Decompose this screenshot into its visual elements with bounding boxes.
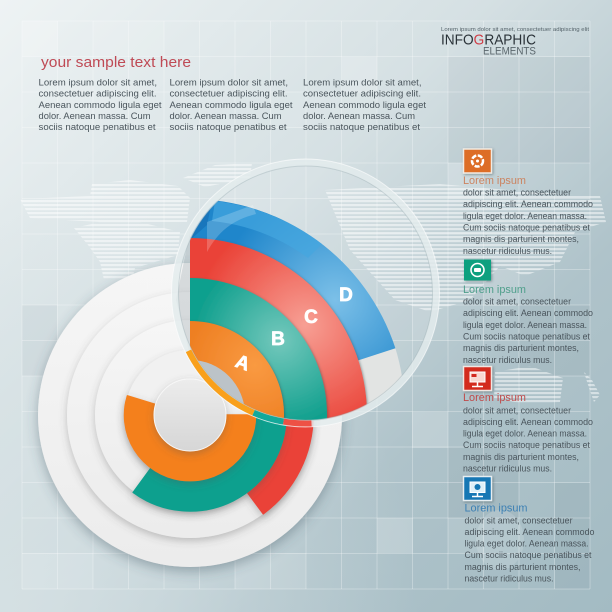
intro column 2: sociis natoque penatibus et: [170, 122, 287, 132]
icon: red monitor: [464, 366, 492, 390]
lens gloss: [207, 205, 256, 252]
intro column 2: Lorem ipsum dolor sit amet,: [170, 78, 288, 88]
block 3 text: nascetur ridiculus mus.: [463, 464, 552, 474]
magnified segments: [190, 200, 402, 421]
title block: INFOGRAPHIC: [441, 32, 536, 48]
intro column 2: [170, 78, 293, 132]
title block: Lorem ipsum dolor sit amet, consectetuer adipiscing elit: [441, 27, 590, 33]
icon: orange target: [464, 149, 492, 173]
intro column 3: Aenean commodo ligula eget: [303, 100, 427, 110]
intro column 1: Aenean commodo ligula eget: [38, 100, 162, 110]
block 4 text: magnis dis parturient montes,: [464, 562, 580, 572]
ring segment: orange lower: [125, 396, 256, 481]
title block: ELEMENTS: [483, 46, 536, 58]
ring segment: red lower: [246, 415, 313, 514]
block 2 text: dolor sit amet, consectetuer: [463, 296, 571, 306]
block 1 text: [463, 175, 593, 256]
white wedge: [358, 348, 402, 404]
faint globe: [476, 510, 524, 570]
block 4 text: Lorem ipsum: [464, 502, 528, 514]
blue dark corner: [192, 210, 210, 238]
intro column 1: [38, 78, 162, 132]
block 1 text: dolor sit amet, consectetuer: [463, 188, 571, 198]
intro column 1: Lorem ipsum dolor sit amet,: [38, 78, 157, 88]
block 2 text: [463, 284, 593, 365]
block 3 text: magnis dis parturient montes,: [463, 452, 579, 462]
center hub disc: [154, 379, 226, 451]
heading: your sample text here: [41, 55, 191, 71]
block 1 text: Cum sociis natoque penatibus et: [463, 222, 590, 232]
letter B: B: [271, 329, 285, 350]
intro column 3: consectetuer adipiscing elit.: [303, 88, 421, 98]
intro column 1: dolor. Aenean massa. Cum: [38, 111, 150, 121]
lens left tint: [176, 232, 190, 355]
block 2 text: nascetur ridiculus mus.: [463, 355, 552, 365]
intro column 3: sociis natoque penatibus et: [303, 122, 421, 132]
block 1 text: Lorem ipsum: [463, 175, 526, 187]
block 2 text: ligula eget dolor. Aenean massa.: [463, 320, 587, 330]
icon: green badge: [464, 260, 491, 280]
refraction: teal: [254, 413, 284, 422]
block 1 text: adipiscing elit. Aenean commodo: [463, 199, 593, 209]
world map: [20, 163, 606, 404]
intro column 2: dolor. Aenean massa. Cum: [170, 111, 282, 121]
letter D: D: [339, 285, 353, 306]
segment letters: [232, 285, 353, 376]
lens rim: [175, 162, 436, 424]
block 2 text: magnis dis parturient montes,: [463, 343, 579, 353]
block 4 text: ligula eget dolor. Aenean massa.: [464, 538, 588, 548]
block 4 text: nascetur ridiculus mus.: [464, 574, 554, 584]
intro column 1: sociis natoque penatibus et: [38, 122, 156, 132]
block 3 text: Lorem ipsum: [463, 392, 526, 404]
title block: [441, 27, 590, 58]
block 3 text: Cum sociis natoque penatibus et: [463, 440, 590, 450]
letter A: A: [232, 351, 253, 376]
block 4 text: Cum sociis natoque penatibus et: [464, 550, 592, 560]
block 2 text: adipiscing elit. Aenean commodo: [463, 308, 593, 318]
intro column 1: consectetuer adipiscing elit.: [38, 88, 156, 98]
intro column 3: dolor. Aenean massa. Cum: [303, 111, 415, 121]
lens rim outlines: [172, 159, 440, 427]
ring segment: teal lower: [133, 415, 286, 511]
block 1 text: ligula eget dolor. Aenean massa.: [463, 211, 587, 221]
intro column 3: Lorem ipsum dolor sit amet,: [303, 78, 422, 88]
block 3 text: ligula eget dolor. Aenean massa.: [463, 428, 587, 438]
block 3 text: [463, 392, 593, 474]
block 3 text: adipiscing elit. Aenean commodo: [463, 417, 593, 427]
intro column 2: consectetuer adipiscing elit.: [170, 88, 288, 98]
blue lighter band: [252, 208, 342, 262]
refraction: red: [284, 422, 312, 424]
intro column 3: [303, 78, 427, 132]
refraction: orange: [188, 351, 254, 413]
letter C: C: [304, 307, 318, 328]
block 2 text: Lorem ipsum: [463, 284, 526, 296]
intro column 2: Aenean commodo ligula eget: [170, 100, 293, 110]
block 4 text: adipiscing elit. Aenean commodo: [464, 527, 594, 537]
concentric white discs: [38, 263, 342, 567]
block 1 text: magnis dis parturient montes,: [463, 234, 579, 244]
blue sector: [190, 200, 396, 360]
block 4 text: [464, 502, 594, 584]
magnifying lens: [171, 158, 440, 428]
block 4 text: dolor sit amet, consectetuer: [464, 516, 572, 526]
icon: blue monitor: [464, 476, 492, 500]
block 3 text: dolor sit amet, consectetuer: [463, 406, 571, 416]
block 2 text: Cum sociis natoque penatibus et: [463, 332, 590, 342]
block 1 text: nascetur ridiculus mus.: [463, 246, 552, 256]
